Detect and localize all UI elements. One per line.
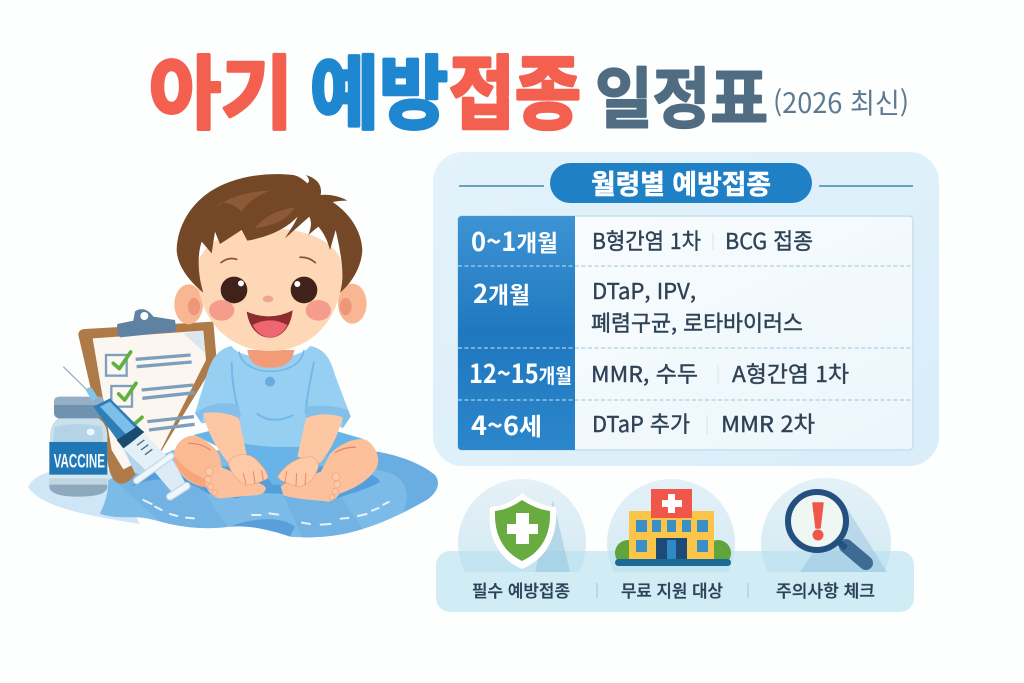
baby shorts — [193, 428, 363, 485]
feature labels: 주의사항 체크 — [776, 577, 875, 602]
illustration: ground pool shadow — [28, 468, 140, 524]
icon: magnifier — [788, 492, 887, 572]
bottom strip — [436, 551, 914, 612]
row: 4-6 years — [471, 406, 815, 443]
illustration: baby — [174, 174, 378, 502]
row: 2 months: 폐렴구균, 로타바이러스 — [591, 306, 803, 338]
shirt — [195, 346, 351, 447]
row: 0-1 months — [471, 222, 813, 259]
baby legs — [174, 436, 378, 494]
feature labels: 무료 지원 대상 — [621, 577, 723, 602]
baby head — [174, 174, 367, 351]
title: schedule: 일정표 — [595, 46, 768, 142]
row: 12-15 months: MMR, 수두 — [591, 357, 698, 389]
schedule table — [458, 216, 913, 450]
baby arms — [203, 412, 247, 463]
row: 12-15 months: 12~15개월 — [469, 354, 572, 391]
title: baby: 아기 — [149, 30, 293, 146]
row: 4-6 years: MMR 2차 — [721, 407, 815, 439]
blanket shadow under baby — [132, 467, 380, 502]
title: year note: (2026 최신) — [773, 82, 909, 122]
row: 12-15 months: A형간염 1차 — [732, 357, 849, 389]
baby mouth — [247, 310, 293, 338]
panel: schedule by age — [433, 152, 939, 466]
neck — [247, 350, 294, 368]
illustration: blanket — [100, 450, 438, 538]
baby face — [197, 228, 342, 351]
feature labels: 필수 예방접종 — [472, 577, 570, 602]
baby hair — [177, 174, 362, 293]
baby nose — [263, 296, 273, 302]
row: 4-6 years: DTaP 추가 — [592, 407, 690, 439]
illustration: clipboard with checklist — [78, 309, 217, 484]
illustration: syringe — [63, 367, 188, 497]
baby torso — [195, 346, 351, 463]
baby eyes — [221, 277, 317, 303]
row: 2 months: DTaP, IPV, — [592, 274, 696, 306]
baby cheeks — [209, 300, 331, 321]
row: 12-15 months — [469, 354, 849, 391]
row: 0-1 months: B형간염 1차 — [592, 224, 701, 256]
title: vaccination blue part: 예방 — [310, 30, 448, 146]
panel heading: 월령별 예방접종 — [591, 163, 771, 202]
title: vaccination red part: 접종 — [449, 30, 581, 146]
row: 2 months: 2개월 — [473, 274, 530, 311]
icon backdrop circles — [458, 478, 891, 572]
baby eyebrows — [221, 257, 315, 263]
icon: shield — [489, 493, 570, 572]
baby ears — [174, 284, 203, 324]
vial label: VACCINE — [54, 451, 105, 472]
row: 0-1 months: 0~1개월 — [471, 222, 558, 259]
title — [149, 30, 909, 146]
row: 2 months — [473, 274, 803, 338]
baby feet and hands — [205, 455, 342, 502]
row: 0-1 months: BCG 접종 — [725, 224, 813, 256]
feature labels — [472, 577, 875, 602]
row: 4-6 years: 4~6세 — [471, 406, 542, 443]
illustration: vaccine vial — [49, 397, 107, 497]
panel heading — [459, 163, 913, 203]
icon: hospital — [615, 489, 731, 566]
